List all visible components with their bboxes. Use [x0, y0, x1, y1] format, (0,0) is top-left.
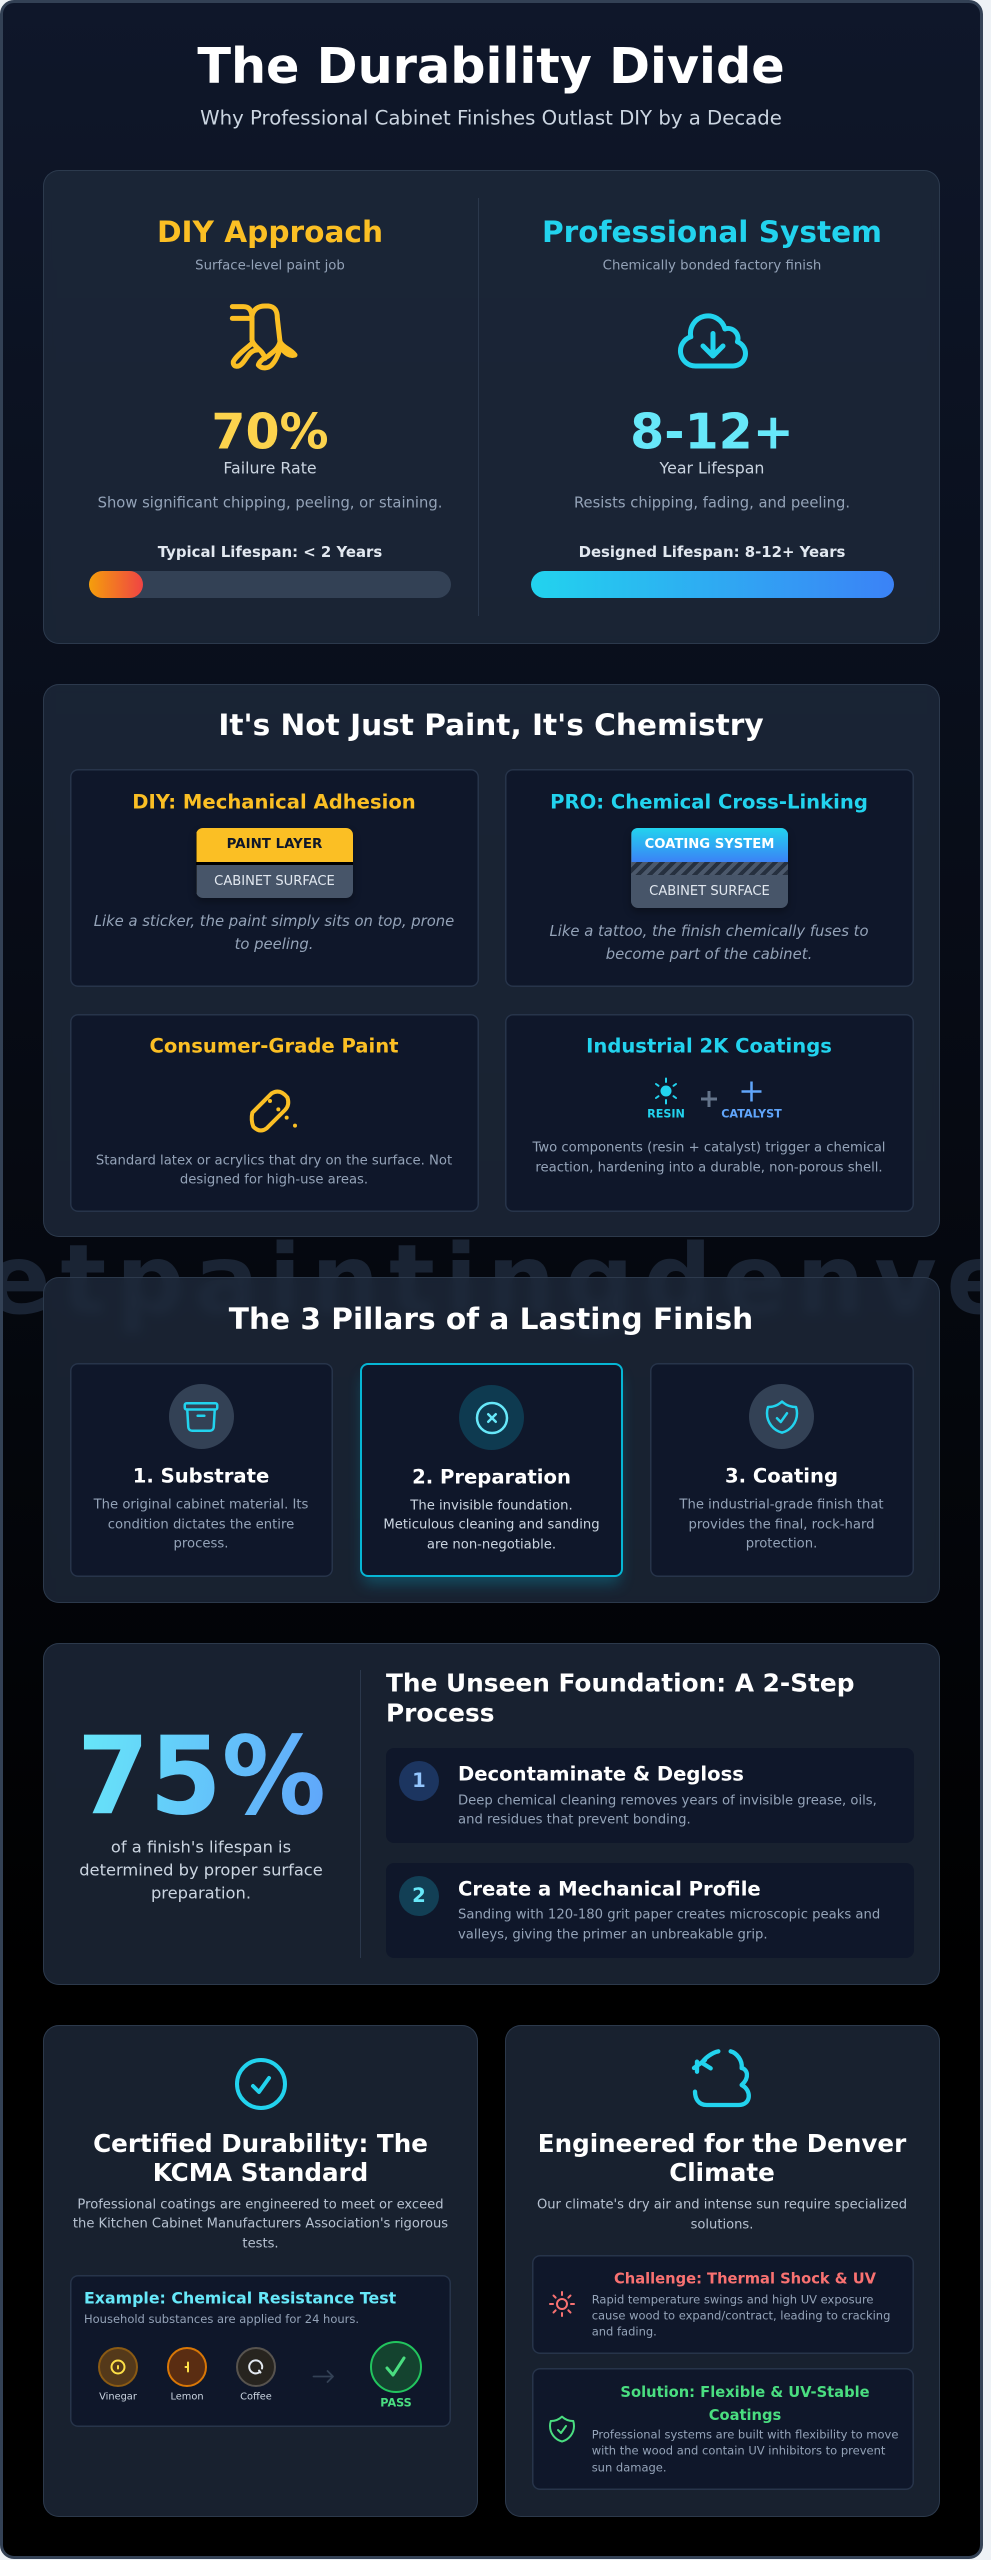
step description: valleys, giving the primer an unbreakable grip.: [458, 1927, 768, 1942]
card: industrial 2K coatings: [504, 1014, 914, 1212]
step description: and residues that prevent bonding.: [458, 1812, 691, 1828]
catalyst label: CATALYST: [721, 1108, 782, 1120]
diagram: coating bonded to surface: [631, 828, 788, 908]
test description: Household substances are applied for 24 hours.: [84, 2312, 359, 2326]
challenge box: [532, 2254, 914, 2354]
analogy text: to peeling.: [235, 936, 313, 952]
icon: shield check: [549, 2416, 575, 2442]
vinegar label: Vinegar: [99, 2392, 137, 2402]
icon: cloud with arrow: [678, 313, 748, 368]
heading: Engineered for the Denver: [538, 2129, 906, 2158]
card heading: PRO: Chemical Cross-Linking: [550, 790, 868, 814]
challenge heading: Challenge: Thermal Shock & UV: [614, 2270, 876, 2288]
description: Professional coatings are engineered to meet or exceed: [77, 2197, 444, 2212]
analogy text: become part of the cabinet.: [606, 946, 812, 962]
step number badge: 2: [412, 1884, 426, 1907]
diagram: paint layer over surface: [196, 828, 353, 898]
stat label: Year Lifespan: [660, 458, 764, 478]
icon: cloud with plane: [692, 2049, 751, 2108]
foundation heading: [386, 1668, 854, 1727]
icon: sun: [549, 2291, 575, 2317]
card description: [679, 1497, 884, 1552]
heading: Certified Durability: The: [93, 2129, 428, 2158]
card description: Standard latex or acrylics that dry on the surface. Not: [96, 1153, 452, 1168]
subtitle: Why Professional Cabinet Finishes Outlast DIY by a Decade: [200, 106, 782, 130]
heading: KCMA Standard: [153, 2158, 368, 2187]
step number badge: [399, 1876, 439, 1916]
DIY lifespan bar: [89, 571, 451, 598]
resin label: RESIN: [647, 1108, 685, 1120]
example test box: [70, 2275, 451, 2426]
step description: [458, 1907, 880, 1942]
card description: [532, 1140, 885, 1175]
description: tests.: [242, 2237, 279, 2252]
card description: The original cabinet material. Its: [94, 1497, 308, 1512]
card heading: Industrial 2K Coatings: [586, 1034, 832, 1058]
diagram: coating bonded to surface: COATING SYSTEM: [645, 837, 774, 852]
card description: provides the final, rock-hard: [688, 1517, 875, 1532]
card description: [94, 1497, 308, 1552]
card: substrate: [70, 1363, 332, 1577]
card description: The industrial-grade finish that: [679, 1497, 884, 1512]
foundation heading: Process: [386, 1698, 494, 1727]
step heading: Decontaminate & Degloss: [458, 1762, 744, 1786]
card: chemical cross-linking: [504, 769, 914, 987]
step number badge: [399, 1761, 439, 1801]
step number badge: 1: [412, 1769, 426, 1792]
panel: KCMA certification: [43, 2025, 478, 2517]
coffee label: Coffee: [240, 2392, 272, 2402]
challenge description: cause wood to expand/contract, leading to cracking: [592, 2308, 890, 2322]
icon: shield: [749, 1384, 814, 1449]
analogy text: [94, 912, 454, 952]
icon: peeling paint: [230, 304, 298, 370]
solution description: [592, 2427, 898, 2474]
description: [537, 2197, 907, 2232]
lemon item: [167, 2347, 207, 2387]
stat: 8-12+: 8-12+: [630, 404, 794, 460]
panel: three pillars: [43, 1277, 940, 1603]
stat: 75%: 75%: [77, 1712, 326, 1839]
professional subheading: Chemically bonded factory finish: [603, 258, 821, 274]
arrow: [312, 2370, 334, 2383]
card description: process.: [174, 1537, 228, 1552]
card heading: Consumer-Grade Paint: [149, 1034, 399, 1058]
pass label: PASS: [380, 2396, 412, 2410]
icon: resin: [655, 1078, 677, 1104]
icon: paint capsule: [250, 1090, 297, 1132]
card heading: 1. Substrate: [133, 1464, 269, 1487]
step description: Sanding with 120-180 grit paper creates microscopic peaks and: [458, 1907, 880, 1922]
vinegar item: [98, 2347, 138, 2387]
DIY lifespan label: Typical Lifespan: < 2 Years: [158, 543, 382, 561]
title: The Durability Divide: [197, 37, 785, 95]
card heading: 3. Coating: [725, 1464, 838, 1487]
card heading: DIY: Mechanical Adhesion: [132, 790, 416, 814]
card description: condition dictates the entire: [108, 1517, 294, 1532]
icon: archive box: [168, 1384, 234, 1449]
solution description: Professional systems are built with flexibility to move: [592, 2427, 898, 2441]
professional lifespan bar: [531, 571, 894, 598]
stat caption: of a finish's lifespan is: [111, 1838, 291, 1856]
stat caption: [79, 1838, 323, 1902]
card heading: 2. Preparation: [412, 1465, 571, 1488]
panel: chemistry: [43, 684, 940, 1237]
DIY description: Show significant chipping, peeling, or staining.: [98, 494, 442, 512]
challenge description: [592, 2292, 890, 2339]
step 2: [386, 1863, 914, 1958]
card description: The invisible foundation.: [410, 1498, 573, 1513]
challenge description: Rapid temperature swings and high UV exposure: [592, 2292, 874, 2306]
professional description: Resists chipping, fading, and peeling.: [574, 494, 850, 512]
card description: Meticulous cleaning and sanding: [383, 1518, 600, 1533]
solution description: with the wood and contain UV inhibitors to prevent: [592, 2444, 885, 2458]
stat: 70%: 70%: [211, 404, 329, 460]
panel: unseen foundation: [43, 1643, 940, 1985]
card: coating: [650, 1363, 914, 1577]
step description: [458, 1793, 877, 1828]
solution description: sun damage.: [592, 2460, 667, 2474]
card description: designed for high-use areas.: [180, 1172, 368, 1188]
card: mechanical adhesion: [70, 769, 478, 987]
DIY subheading: Surface-level paint job: [195, 258, 345, 274]
description: solutions.: [691, 2217, 753, 2232]
stat caption: determined by proper surface: [79, 1860, 323, 1880]
card: preparation (highlighted): [360, 1363, 623, 1577]
pass badge: [370, 2341, 422, 2393]
step 1: [386, 1748, 914, 1843]
card description: protection.: [746, 1537, 817, 1552]
diagram: paint layer over surface: CABINET SURFACE: [214, 874, 335, 889]
test heading: Example: Chemical Resistance Test: [84, 2288, 396, 2308]
icon: x circle: [459, 1385, 524, 1450]
card description: reaction, hardening into a durable, non-porous shell.: [535, 1160, 883, 1175]
heading: Climate: [669, 2158, 775, 2187]
challenge description: and fading.: [592, 2325, 657, 2339]
diagram: paint layer over surface: PAINT LAYER: [227, 837, 322, 852]
pillars heading: The 3 Pillars of a Lasting Finish: [229, 1302, 753, 1336]
description: the Kitchen Cabinet Manufacturers Association's rigorous: [73, 2217, 448, 2232]
solution heading: Solution: Flexible & UV-Stable: [620, 2383, 870, 2400]
stat label: Failure Rate: [223, 458, 317, 478]
foundation heading: The Unseen Foundation: A 2-Step: [386, 1668, 854, 1697]
diagram: coating bonded to surface: CABINET SURFACE: [649, 884, 770, 899]
card description: Two components (resin + catalyst) trigger a chemical: [533, 1140, 885, 1155]
icon: catalyst: [742, 1082, 762, 1102]
solution box: [532, 2368, 914, 2490]
DIY heading: DIY Approach: [157, 215, 383, 249]
professional lifespan label: Designed Lifespan: 8-12+ Years: [579, 543, 845, 561]
panel: DIY vs professional comparison: [43, 170, 940, 644]
analogy text: [549, 922, 869, 962]
chemistry heading: It's Not Just Paint, It's Chemistry: [218, 708, 764, 742]
analogy text: Like a tattoo, the finish chemically fuses to: [549, 922, 869, 940]
description: [73, 2197, 448, 2252]
step heading: Create a Mechanical Profile: [458, 1878, 761, 1900]
professional heading: Professional System: [542, 215, 882, 249]
description: Our climate's dry air and intense sun require specialized: [537, 2197, 907, 2212]
analogy text: Like a sticker, the paint simply sits on top, prone: [94, 912, 454, 930]
step description: Deep chemical cleaning removes years of invisible grease, oils,: [458, 1793, 877, 1808]
heading: [93, 2129, 428, 2187]
card description: [96, 1153, 452, 1188]
card description: [383, 1498, 600, 1553]
coffee item: [236, 2347, 276, 2387]
plus sign: [701, 1091, 717, 1107]
solution heading: [620, 2383, 870, 2424]
panel: Denver climate: [504, 2025, 940, 2517]
card: consumer-grade paint: [70, 1014, 478, 1212]
heading: [538, 2129, 906, 2187]
lemon label: Lemon: [170, 2392, 204, 2402]
solution heading: Coatings: [709, 2406, 781, 2424]
icon: check circle: [235, 2058, 287, 2110]
stat caption: preparation.: [151, 1884, 251, 1902]
card description: are non-negotiable.: [427, 1538, 556, 1553]
